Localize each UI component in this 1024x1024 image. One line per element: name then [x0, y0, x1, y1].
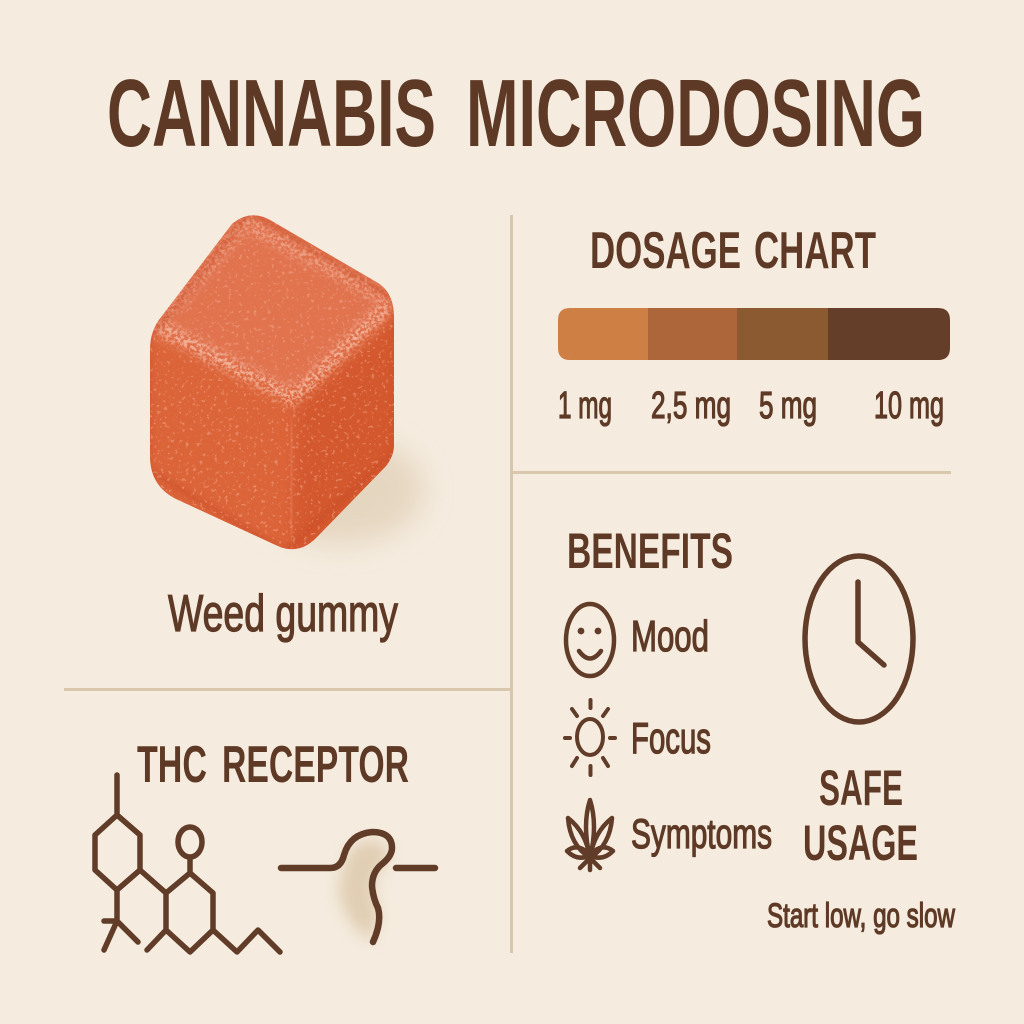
icon: clock — [805, 556, 913, 722]
THC receptor heading: RECEPTOR — [222, 736, 409, 794]
focus label: Focus — [631, 714, 711, 763]
icon: sun — [565, 700, 615, 775]
title: CANNABIS — [107, 60, 436, 167]
gummy label: Weed gummy — [168, 585, 398, 643]
icon: smiley — [566, 604, 614, 676]
safe usage heading — [803, 760, 918, 871]
dosage labels — [558, 385, 944, 427]
dosage labels: 5 mg — [759, 385, 817, 427]
symptoms label: Symptoms — [631, 810, 772, 857]
icon: cannabis leaf — [567, 800, 613, 870]
dosage bar chart — [558, 308, 950, 360]
mood label: Mood — [631, 612, 709, 661]
benefits heading: BENEFITS — [567, 523, 733, 579]
dosage labels: 2,5 mg — [651, 385, 731, 427]
icon: receptor — [281, 832, 435, 942]
THC receptor heading: THC — [137, 736, 207, 794]
icon: THC molecule — [95, 775, 280, 952]
safe usage heading: USAGE — [803, 815, 918, 871]
dosage labels: 1 mg — [558, 385, 612, 427]
dosage chart heading: DOSAGE — [590, 222, 741, 280]
dosage labels: 10 mg — [874, 385, 944, 427]
safe usage note: Start low, go slow — [767, 897, 955, 935]
dosage chart heading: CHART — [754, 222, 876, 280]
THC receptor heading — [137, 736, 409, 794]
safe usage heading: SAFE — [819, 760, 903, 816]
icon: weed gummy cube — [150, 215, 431, 553]
title — [107, 60, 925, 167]
